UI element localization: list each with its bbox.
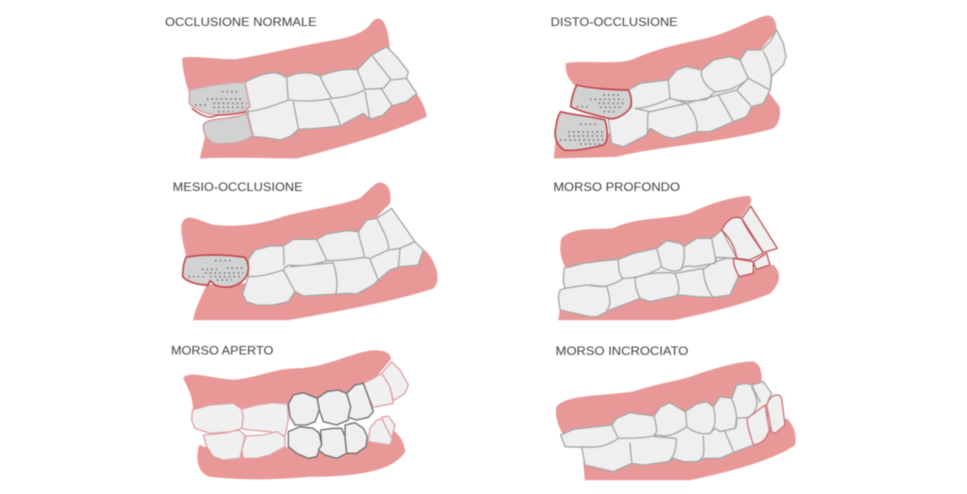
red-outlined crossed teeth <box>747 395 785 445</box>
title: mesio-occlusione: MESIO-OCCLUSIONE <box>173 180 303 194</box>
teeth <box>245 47 417 140</box>
teeth <box>608 30 786 147</box>
upper gum <box>181 183 390 267</box>
pink-outlined teeth <box>192 362 408 460</box>
upper incisor with dots <box>189 82 250 115</box>
teeth <box>243 208 423 305</box>
upper gum <box>182 19 390 97</box>
teeth <box>561 382 772 472</box>
red-outlined front teeth <box>722 206 777 277</box>
panel: disto-occlusione <box>551 15 786 158</box>
panel: occlusione normale <box>165 15 427 158</box>
upper incisor with dots <box>571 85 631 119</box>
lower gum <box>554 92 780 158</box>
lower gum <box>193 250 437 320</box>
upper gum <box>556 362 762 435</box>
panel: mesio-occlusione <box>173 180 437 320</box>
upper gum <box>183 350 391 413</box>
incisor dots <box>195 92 247 112</box>
teeth <box>558 230 738 317</box>
title: morso incrociato: MORSO INCROCIATO <box>556 344 688 358</box>
title: disto-occlusione: DISTO-OCCLUSIONE <box>551 15 678 29</box>
incisor contact line <box>192 108 247 117</box>
lower gum <box>200 92 427 158</box>
dark-outlined teeth <box>288 383 373 458</box>
panel: morso profondo <box>553 180 779 320</box>
incisor dots <box>188 261 243 280</box>
upper gum <box>560 196 751 270</box>
incisor dots <box>560 95 623 144</box>
panel: morso incrociato <box>556 344 795 480</box>
lower gum <box>198 430 405 479</box>
title: occlusione normale: OCCLUSIONE NORMALE <box>165 15 317 29</box>
lower incisor with dots <box>555 112 607 150</box>
lower gum <box>583 418 795 480</box>
upper gum <box>566 16 776 97</box>
title: morso profondo: MORSO PROFONDO <box>553 180 680 194</box>
title: morso aperto: MORSO APERTO <box>171 343 273 357</box>
incisor with dots <box>183 255 248 287</box>
lower incisor <box>203 113 253 144</box>
lower gum <box>558 265 779 320</box>
panel: morso aperto <box>171 343 408 479</box>
